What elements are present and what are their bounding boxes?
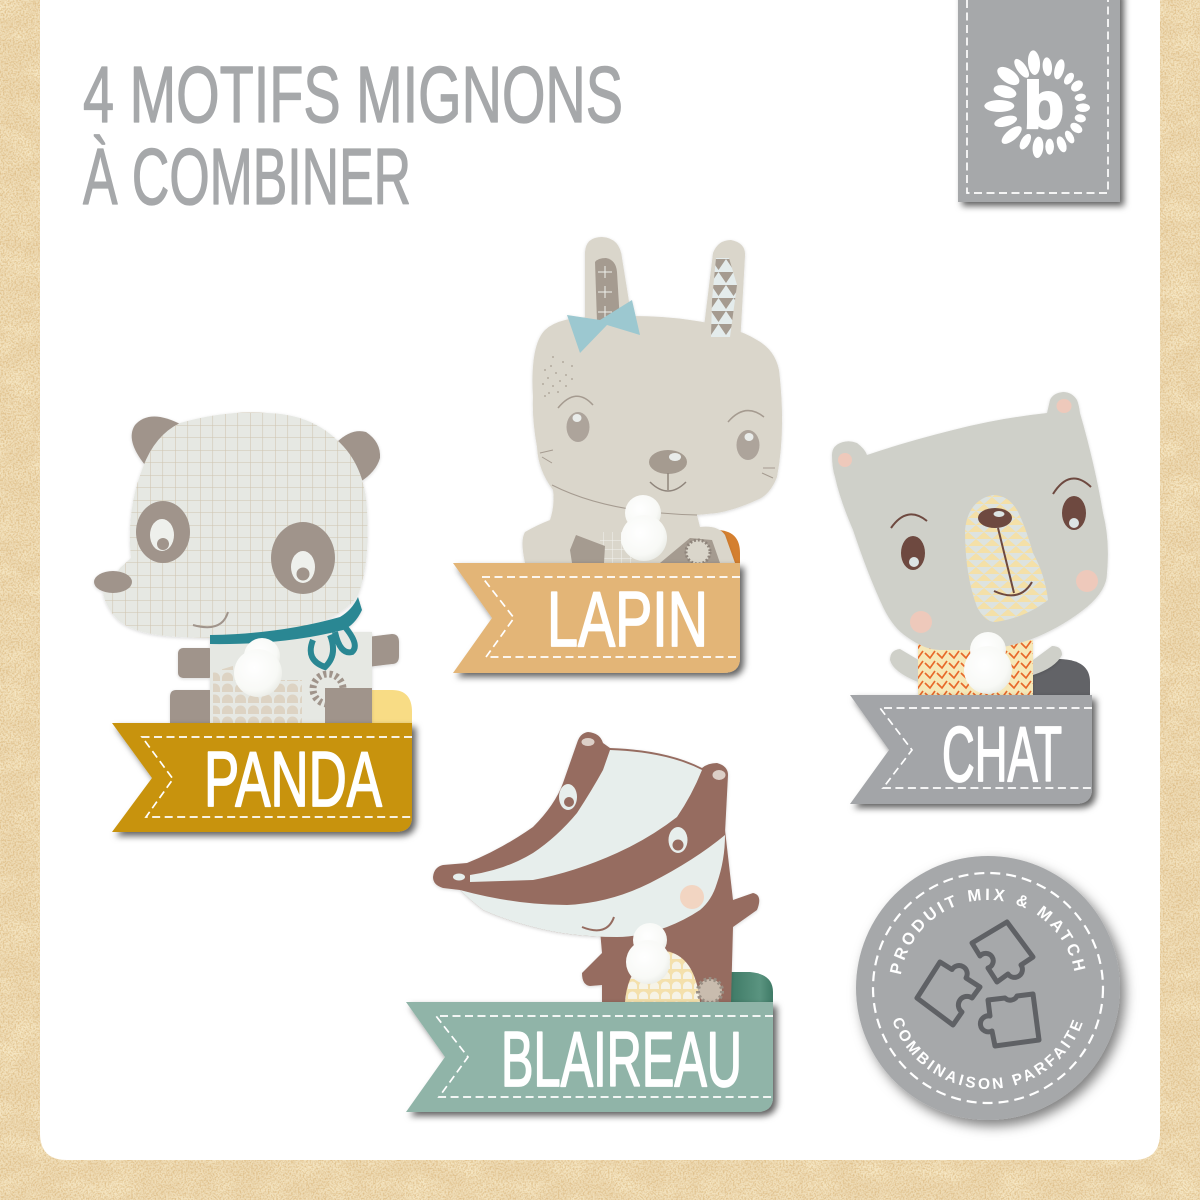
panda nose (94, 571, 132, 593)
blaireau ribbon: BLAIREAU (501, 1015, 742, 1103)
badger head (433, 732, 728, 937)
title: 4 MOTIFS MIGNONS (83, 50, 623, 139)
cat face (891, 478, 1098, 633)
icon: sun logo: b (1024, 68, 1064, 141)
lapin card (453, 237, 782, 673)
rabbit illustration (522, 237, 782, 564)
ribbon fold: lapin (716, 530, 740, 563)
lapin ribbon: LAPIN (547, 575, 708, 663)
panda illustration (90, 405, 399, 723)
rabbit face (540, 396, 775, 515)
rabbit paws and belly (570, 532, 720, 564)
blaireau card (406, 732, 773, 1112)
badge bottom text: COMBINAISON PARFAITE (894, 1018, 1083, 1089)
icon: sun logo (984, 50, 1090, 158)
chat ribbon: CHAT (942, 710, 1062, 798)
badge top text: PRODUIT MIX & MATCH (890, 888, 1086, 974)
freckles (542, 356, 573, 397)
lapin ribbon (453, 563, 740, 673)
panda card (90, 405, 412, 832)
icon: puzzle pieces (917, 922, 1039, 1046)
ribbon fold: panda (372, 690, 412, 723)
panda eye left (136, 501, 190, 563)
title (83, 50, 623, 221)
teal scarf (210, 597, 362, 667)
cat muzzle (965, 495, 1048, 622)
blaireau ribbon (406, 1002, 773, 1112)
ribbon fold: chat (1033, 659, 1090, 695)
ribbon fold: blaireau (730, 972, 773, 1002)
panda ribbon: PANDA (204, 735, 382, 823)
badger face (453, 738, 726, 930)
panda ribbon (112, 723, 412, 832)
title: À COMBINER (83, 132, 411, 221)
rabbit ear patterns (595, 258, 737, 337)
badge: mix & match (852, 854, 1134, 1134)
bow (567, 300, 640, 353)
panda eye right (271, 522, 335, 594)
chat ribbon (850, 695, 1092, 804)
badger illustration (433, 732, 759, 1003)
cat illustration (832, 392, 1108, 695)
chat card (832, 392, 1108, 804)
badger body (582, 830, 759, 1002)
brand tag with logo (958, 0, 1120, 202)
